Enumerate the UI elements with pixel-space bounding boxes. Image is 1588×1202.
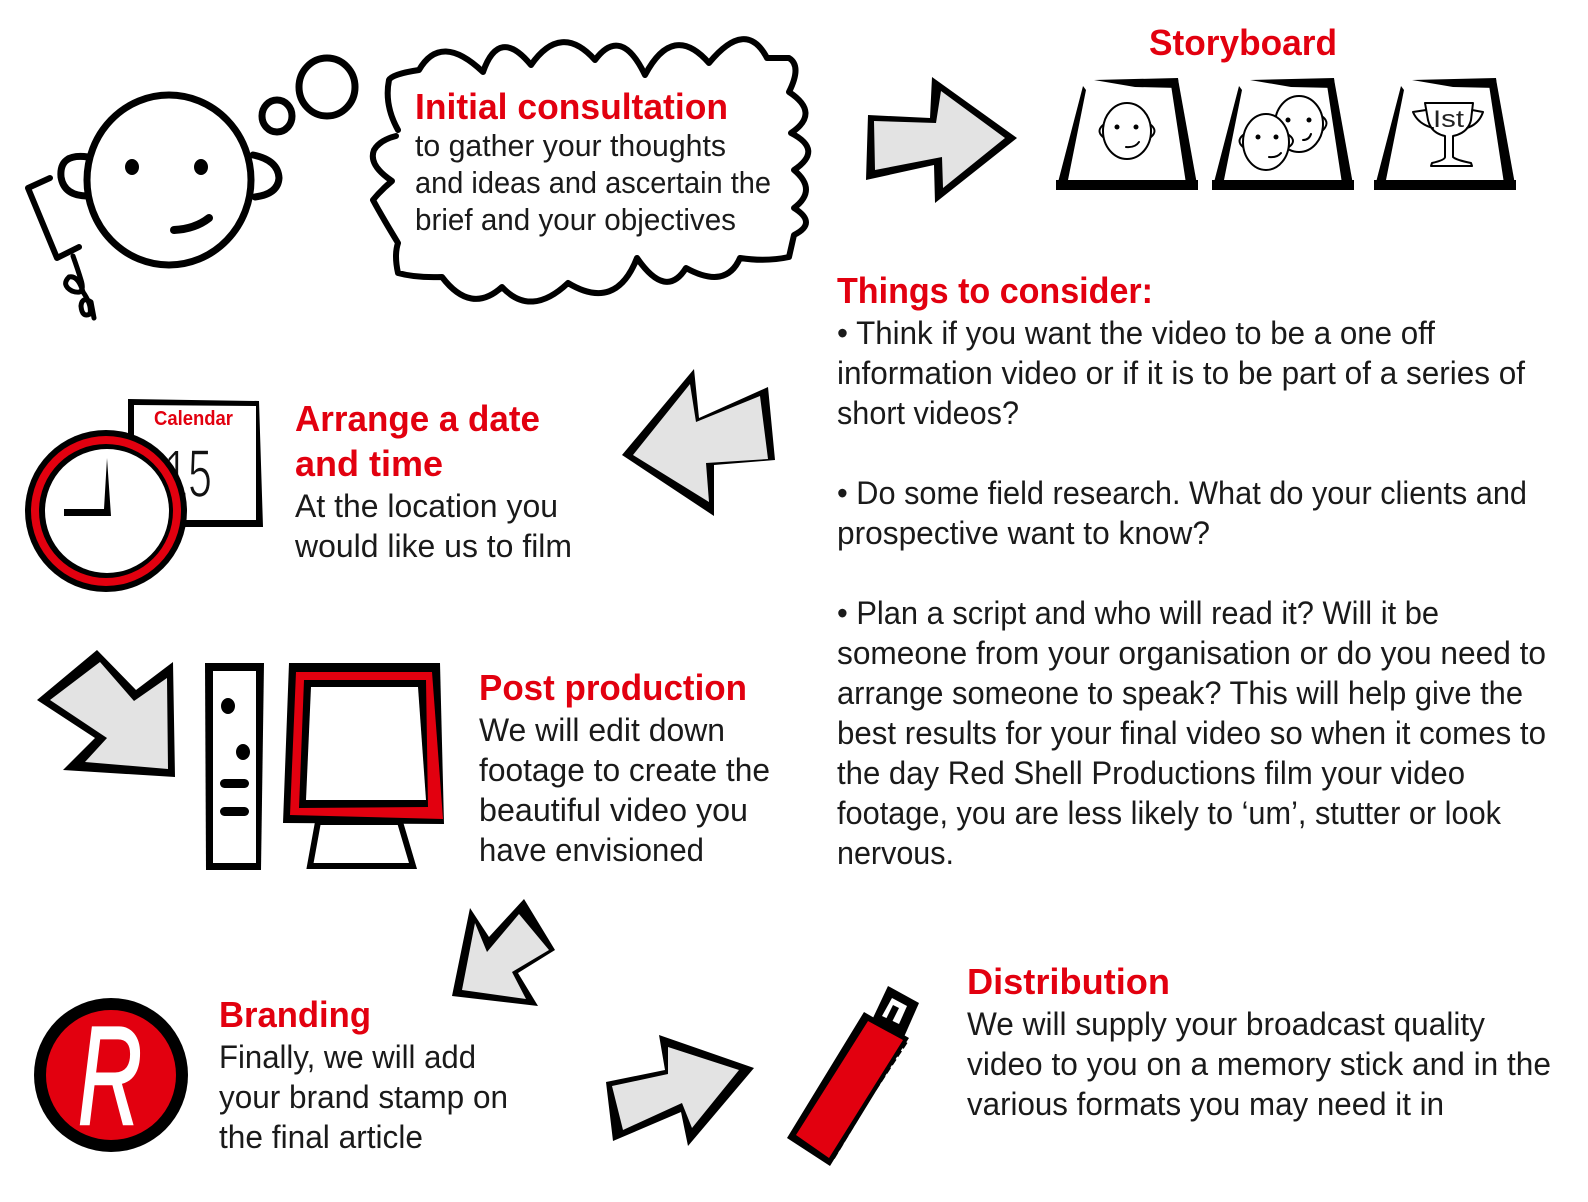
bullet 3 text: someone from your organisation or do you need to	[837, 635, 1546, 671]
icon: memory stick	[787, 986, 919, 1166]
arrow: date to post production	[37, 650, 175, 777]
storyboard frame 3: trophy	[1374, 78, 1516, 190]
distribution text	[967, 1006, 1551, 1122]
arrow: consultation to storyboard	[866, 77, 1017, 203]
trophy label: Ist	[1433, 106, 1464, 133]
text block: branding	[219, 994, 508, 1155]
bullet 3 text: footage, you are less likely to ‘um’, stutter or look	[837, 795, 1502, 831]
cloud heading: Initial consultation	[415, 86, 728, 127]
storyboard frame 2	[1212, 78, 1354, 190]
monitor stand	[310, 822, 413, 866]
cloud text	[415, 128, 771, 237]
icon: person on the phone thinking	[28, 58, 355, 318]
date heading	[295, 398, 540, 484]
monitor	[283, 663, 444, 824]
branding text	[219, 1039, 508, 1155]
bullet 1 text: • Think if you want the video to be a one off	[837, 315, 1435, 351]
branding text: the final article	[219, 1119, 423, 1155]
branding text: Finally, we will add	[219, 1039, 476, 1075]
bullet 3 text: the day Red Shell Productions film your video	[837, 755, 1465, 791]
date heading: Arrange a date	[295, 398, 540, 439]
icon: brand stamp	[34, 997, 188, 1154]
post production text: footage to create the	[479, 752, 770, 788]
bullet 2 text: • Do some field research. What do your clients and	[837, 475, 1527, 511]
text block: arrange a date and time	[294, 398, 572, 564]
bullet 3 text: • Plan a script and who will read it? Will it be	[837, 595, 1439, 631]
bullet 1 text	[837, 315, 1525, 431]
bullet 1 text: information video or if it is to be part of a series of	[837, 355, 1525, 391]
branding heading: Branding	[219, 994, 371, 1035]
arrow: branding to distribution	[606, 1035, 754, 1146]
calendar label: Calendar	[154, 408, 233, 430]
storyboard frame 1	[1056, 78, 1198, 190]
panel: things to consider	[837, 270, 1546, 871]
bullet 3 text: arrange someone to speak? This will help give the	[837, 675, 1523, 711]
calendar date: 15	[164, 436, 212, 512]
post production text: have envisioned	[479, 832, 704, 868]
distribution text: We will supply your broadcast quality	[967, 1006, 1485, 1042]
cloud outline	[373, 39, 808, 302]
bullet 2 text: prospective want to know?	[837, 515, 1210, 551]
bullet 2 text	[837, 475, 1527, 551]
post production heading: Post production	[479, 667, 747, 708]
panel: storyboard	[1056, 22, 1516, 190]
branding text: your brand stamp on	[219, 1079, 508, 1115]
cloud text: brief and your objectives	[415, 202, 736, 237]
stick connector	[872, 986, 919, 1037]
storyboard heading: Storyboard	[1149, 22, 1337, 63]
things to consider heading: Things to consider:	[837, 270, 1153, 311]
icon: calendar and clock	[25, 399, 263, 592]
date heading: and time	[295, 443, 443, 484]
distribution heading: Distribution	[967, 961, 1170, 1002]
date text	[294, 488, 572, 564]
bullet 3 text	[837, 595, 1546, 871]
post production text	[479, 712, 770, 868]
arrow: storyboard to date and time	[622, 369, 775, 516]
bullet 3 text: nervous.	[837, 835, 954, 871]
post production text: We will edit down	[479, 712, 725, 748]
text block: post production	[479, 667, 770, 868]
brand letter: R	[78, 997, 142, 1154]
panel: initial consultation thought cloud	[373, 39, 808, 302]
cloud text: to gather your thoughts	[415, 128, 726, 163]
arrow: post production to branding	[452, 899, 555, 1006]
date text: At the location you	[295, 488, 558, 524]
date text: would like us to film	[294, 528, 572, 564]
distribution text: video to you on a memory stick and in the	[967, 1046, 1551, 1082]
calendar page	[128, 399, 263, 527]
post production text: beautiful video you	[479, 792, 748, 828]
computer tower	[205, 663, 264, 870]
distribution text: various formats you may need it in	[967, 1086, 1444, 1122]
cloud text: and ideas and ascertain the	[415, 165, 771, 200]
stick body	[787, 1012, 909, 1166]
bullet 3 text: best results for your final video so when it comes to	[837, 715, 1546, 751]
icon: desktop computer	[205, 663, 444, 870]
text block: distribution	[967, 961, 1551, 1122]
clock	[25, 430, 187, 592]
bullet 1 text: short videos?	[837, 395, 1019, 431]
